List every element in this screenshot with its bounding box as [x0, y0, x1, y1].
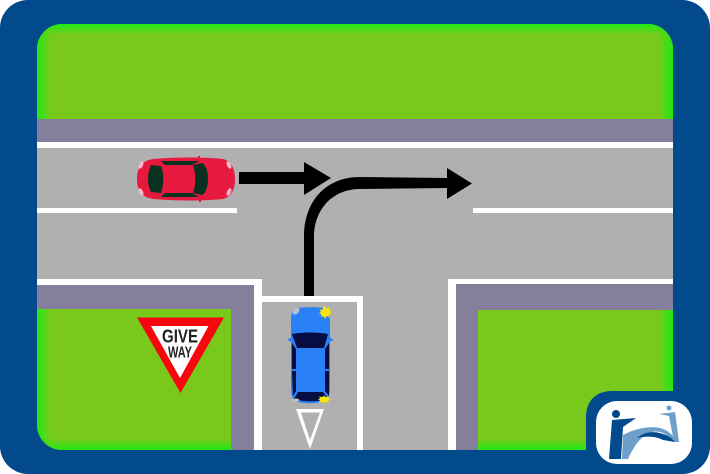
- side windows: [161, 161, 199, 165]
- rear window: [148, 165, 163, 193]
- light bridge: [622, 427, 677, 459]
- headlights: [225, 161, 233, 169]
- windscreen: [292, 332, 328, 348]
- badge backing: [586, 391, 710, 474]
- dark bridge arc: [637, 432, 675, 442]
- give way line box: [258, 296, 363, 450]
- front indicator flashing: [319, 306, 332, 319]
- mirrors: [198, 156, 200, 162]
- sign text: give: GIVE: [162, 326, 198, 346]
- give way road triangle: [296, 409, 324, 449]
- road line: top edge: [37, 142, 673, 148]
- car body: [291, 307, 330, 403]
- side windows: [292, 343, 296, 369]
- rear indicator flashing: [318, 396, 331, 404]
- headlight: [291, 306, 301, 316]
- kerb: bottom right: [455, 284, 673, 450]
- kerb: bottom left: [37, 284, 255, 450]
- road surface: [37, 148, 673, 450]
- outer frame corner: [682, 446, 710, 474]
- red car: [137, 156, 235, 202]
- logo badge: [586, 391, 710, 474]
- dark figure: [612, 410, 620, 418]
- road line: left centre: [37, 208, 237, 213]
- mirrors: [287, 337, 292, 342]
- sign triangle: [137, 318, 224, 393]
- arrow: turning right: [304, 168, 472, 296]
- give way sign: [137, 318, 224, 393]
- kerb: top: [37, 119, 673, 143]
- front window: [193, 163, 208, 195]
- blue car: [287, 306, 334, 404]
- road line: right centre: [473, 208, 673, 213]
- tail light: [292, 398, 300, 402]
- tail lights: [137, 161, 145, 169]
- light figure: [666, 406, 672, 410]
- arrow: straight ahead: [239, 162, 331, 195]
- rear window: [294, 392, 328, 401]
- road line: left corner: [37, 279, 262, 450]
- sign text: way: WAY: [168, 344, 192, 362]
- badge plate: [596, 401, 692, 464]
- car body: [137, 158, 235, 200]
- road line: right corner: [448, 279, 673, 450]
